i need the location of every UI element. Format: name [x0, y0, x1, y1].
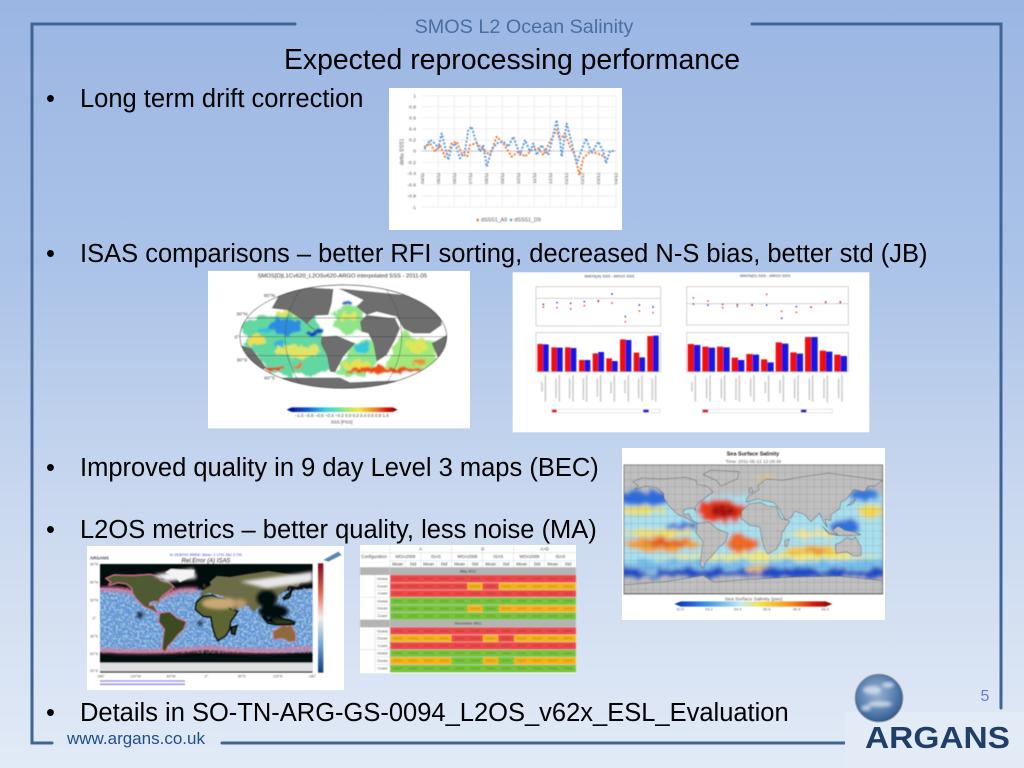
x axis labels: 07/11 — [468, 172, 473, 184]
panel: metrics table — [360, 545, 576, 673]
panel: relative error world map — [87, 546, 344, 690]
chart title right: SMOS(D) SSS - ARGO SSS — [740, 273, 791, 278]
table header: WOA2009 — [457, 554, 478, 559]
series dSSS1_A9 — [425, 130, 606, 175]
x axis labels — [420, 172, 618, 184]
table header: Std — [534, 561, 541, 566]
plot frames — [536, 287, 848, 372]
map timestamp: Time: 2011-05-12 12:28:48 — [726, 459, 782, 464]
header: presentation name: SMOS L2 Ocean Salinity — [415, 16, 634, 38]
chart legend: dSSS1_A9 — [481, 218, 507, 224]
latitude and longitude tick labels: 90°N — [90, 563, 99, 567]
ARGANS logo — [845, 674, 1024, 768]
bullet: details reference: Details in SO-TN-ARG-GS-0094_L2OS_v62x_ESL_Evaluation — [80, 699, 789, 727]
colour bar labels: 36.8 — [793, 607, 801, 612]
y axis labels: 0.8 — [409, 104, 416, 110]
y axis labels: -0.2 — [407, 160, 416, 166]
y axis labels: 0.6 — [409, 115, 416, 121]
x axis labels: 02/12 — [580, 172, 585, 184]
ocean field — [100, 588, 313, 653]
bias dots — [543, 294, 840, 322]
table row labels: May 2011 — [460, 569, 476, 573]
map latitude labels: 30°S — [236, 358, 248, 364]
map title: SMOS[D]L1Cv620_L2OSv620-ARGO interpolated SSS - 2011-05 — [258, 274, 427, 280]
panel: bias and std bar charts — [513, 272, 869, 432]
blue std bars — [543, 336, 847, 372]
map latitude labels: 0° — [235, 334, 239, 340]
table header: D — [481, 546, 484, 551]
chart legend: dSSS1_D9 — [514, 218, 541, 224]
month band: May 2011 — [360, 567, 576, 575]
table row labels: Global — [377, 577, 388, 581]
latitude and longitude tick labels: 30°N — [90, 599, 99, 603]
y axis labels: 0 — [413, 149, 416, 155]
dark patches — [137, 590, 288, 626]
siberian snow — [240, 572, 313, 588]
table header: A+D — [540, 546, 549, 551]
bullet: long term drift correction: Long term drift correction — [80, 85, 363, 113]
y axis labels — [407, 93, 416, 211]
table row labels: Ocean — [377, 659, 388, 663]
x axis labels: 06/11 — [452, 172, 457, 184]
colour bar — [674, 601, 832, 607]
table row labels: Global — [377, 652, 388, 656]
chart gridlines — [422, 96, 616, 207]
x axis labels: 04/11 — [420, 172, 425, 184]
table header: Mean — [547, 561, 559, 566]
map title: Sea Surface Salinity — [727, 451, 780, 457]
colour bar unit: SSS [PSS] — [331, 419, 353, 424]
y axis labels: -1 — [412, 205, 416, 211]
sahara and arabia — [202, 597, 238, 609]
colour bar labels: −1.0 −0.8 −0.6 −0.4 −0.2 0.0 0.2 0.4 0.6 0.8 1.0 — [295, 413, 389, 418]
bullet: ISAS comparisons: • — [46, 240, 55, 268]
colour bar labels — [676, 607, 830, 612]
continents — [107, 569, 313, 652]
latitude and longitude tick labels: 60°E — [238, 675, 247, 679]
x axis labels: 08/11 — [484, 172, 489, 184]
x axis labels: 05/11 — [436, 172, 441, 184]
panel: drift time series chart — [389, 88, 622, 230]
latitude and longitude tick labels — [90, 563, 317, 679]
latitude and longitude tick labels: 60°N — [90, 581, 99, 585]
bullet: ISAS comparisons: ISAS comparisons – better RFI sorting, decreased N-S bias, better std (JB) — [80, 240, 928, 268]
footnote — [100, 681, 185, 684]
y axis labels: 1 — [413, 93, 416, 99]
map stats line: N: 2936741 RMSE: Mean: 2.1741 Std: 2.791 — [170, 553, 242, 557]
continents — [624, 470, 883, 593]
red rows — [390, 575, 576, 657]
bullet: long term drift correction: • — [46, 85, 55, 113]
table header: WOA2009 — [519, 554, 540, 559]
y axis labels: -0.6 — [407, 182, 416, 188]
table row labels: Ocean — [377, 584, 388, 588]
table row labels: Global — [377, 599, 388, 603]
table row labels: Coast — [378, 614, 387, 618]
map title: Rel.Error (A) ISAS — [182, 558, 230, 564]
y axis title: delta SSS1 — [399, 138, 405, 165]
table header: Std — [410, 561, 417, 566]
latitude and longitude tick labels: 90°S — [90, 669, 99, 673]
table row labels: Ocean — [377, 607, 388, 611]
map colour bar — [287, 407, 398, 412]
table row labels: November 2011 — [455, 622, 481, 626]
latitude and longitude tick labels: 120°E — [273, 675, 283, 679]
latitude and longitude tick labels: 180° — [309, 675, 317, 679]
bullet: L2OS metrics: • — [46, 516, 55, 544]
x axis labels: 04/12 — [613, 172, 618, 184]
title: Expected reprocessing performance — [284, 44, 740, 76]
x axis labels: 03/12 — [596, 172, 601, 184]
table row labels: Ocean — [377, 637, 388, 641]
latitude and longitude tick labels: 0° — [93, 616, 97, 620]
colour bar labels: 33.2 — [705, 607, 714, 612]
bullet: L2OS metrics: L2OS metrics – better quality, less noise (MA) — [80, 516, 597, 544]
table header: Configuration — [361, 554, 387, 559]
x axis labels: 01/12 — [564, 172, 569, 184]
table row labels: Coast — [378, 644, 387, 648]
map image — [100, 564, 313, 673]
map ocean and land — [240, 285, 447, 392]
table row labels: Global — [377, 629, 388, 633]
latitude and longitude tick labels: 180° — [97, 675, 105, 679]
chart zero axis — [422, 150, 616, 152]
x axis labels: 10/11 — [516, 172, 521, 184]
panel: Mollweide SSS difference map — [208, 271, 470, 428]
y axis labels: -0.4 — [407, 171, 416, 177]
table row labels: Coast — [378, 592, 387, 596]
table header: Std — [565, 561, 572, 566]
x axis labels: 09/11 — [500, 172, 505, 184]
latitude and longitude tick labels: 60°S — [90, 652, 99, 656]
salinity field — [612, 465, 892, 594]
page number: 5 — [981, 688, 990, 705]
latitude and longitude tick labels: 0° — [205, 675, 209, 679]
antarctic ice — [100, 663, 313, 671]
colour bar title: Sea Surface Salinity (psu) — [725, 596, 783, 602]
table header: Mean — [423, 561, 435, 566]
x axis labels: 12/11 — [548, 172, 553, 184]
panel: sea surface salinity map — [612, 448, 892, 620]
table header — [361, 546, 572, 566]
series dSSS1_D9 — [425, 120, 616, 167]
table header: Std — [472, 561, 479, 566]
map latitude labels: 30°N — [236, 312, 248, 318]
table header: Std — [441, 561, 448, 566]
map latitude labels — [235, 293, 276, 381]
table header: A — [419, 546, 422, 551]
latitude and longitude tick labels: 30°S — [90, 634, 99, 638]
red std bars — [537, 336, 841, 372]
colour bar labels: 35.6 — [763, 607, 771, 612]
table header: Std — [503, 561, 510, 566]
colour bar — [318, 563, 323, 673]
latitude and longitude tick labels: 60°W — [167, 675, 176, 679]
chart title left: SMOS(A) SSS - ARGO SSS — [584, 273, 635, 278]
logo wordmark: ARGANS — [865, 720, 1010, 755]
chart legends — [552, 409, 832, 413]
bullet: improved quality in level 3 maps: • — [46, 454, 55, 482]
y axis labels: -0.8 — [407, 194, 416, 200]
table header: Mean — [454, 561, 466, 566]
canadian snow — [153, 568, 197, 582]
chart legend — [476, 218, 541, 224]
table header: Mean — [392, 561, 404, 566]
y axis labels: 0.4 — [409, 126, 416, 132]
category label smudges — [542, 375, 842, 402]
colour bar labels: 38.0 — [821, 607, 830, 612]
table grid — [360, 545, 576, 672]
table row labels — [377, 569, 481, 671]
table header: ISAS — [431, 554, 441, 559]
colour bar labels: 34.4 — [734, 607, 742, 612]
table header: ISAS — [493, 554, 503, 559]
table header: WOA2009 — [395, 554, 416, 559]
cell value smudges — [393, 579, 576, 668]
latitude and longitude tick labels: 120°W — [130, 675, 142, 679]
green rows — [390, 597, 576, 672]
footer URL: www.argans.co.uk — [66, 729, 205, 748]
month band: November 2011 — [360, 620, 576, 627]
logo label: ARGANS — [90, 555, 109, 560]
map latitude labels: 60°N — [264, 293, 275, 299]
orange cells — [390, 583, 576, 665]
colour bar labels: 32.0 — [676, 607, 685, 612]
y axis labels: 0.2 — [409, 138, 416, 144]
table header: Mean — [516, 561, 528, 566]
bullet: details reference: • — [46, 699, 55, 727]
icon: globe — [855, 674, 903, 722]
table header: ISAS — [555, 554, 565, 559]
satellite logo — [323, 552, 342, 562]
table header: Mean — [485, 561, 497, 566]
x axis labels: 11/11 — [532, 172, 537, 184]
table row labels: Coast — [378, 667, 387, 671]
bullet: improved quality in level 3 maps: Improved quality in 9 day Level 3 maps (BEC) — [80, 454, 599, 482]
map latitude labels: 60°S — [264, 375, 276, 381]
lat-lon grid — [624, 465, 883, 594]
